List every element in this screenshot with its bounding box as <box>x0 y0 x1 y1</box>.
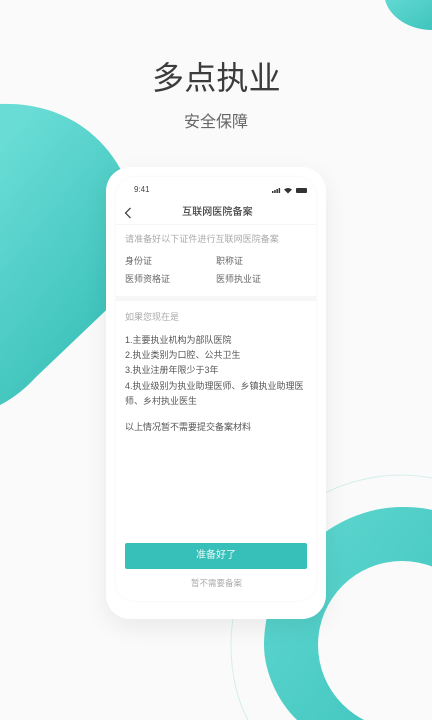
conditions list <box>125 335 304 406</box>
ready button: 准备好了 <box>196 550 236 561</box>
documents list: 职称证 <box>216 256 243 266</box>
documents list: 医师执业证 <box>216 274 261 284</box>
title: 多点执业 <box>152 60 281 96</box>
header divider <box>116 224 316 225</box>
documents list: 医师资格证 <box>125 274 170 284</box>
conditions list: 4.执业级别为执业助理医师、乡镇执业助理医师、乡村执业医生 <box>125 381 304 406</box>
screen heading: 互联网医院备案 <box>182 207 253 218</box>
back arrow icon <box>124 208 131 218</box>
ready button <box>125 543 307 569</box>
conditions list: 2.执业类别为口腔、公共卫生 <box>125 350 241 360</box>
skip link: 暂不需要备案 <box>191 578 242 588</box>
section divider <box>116 296 316 301</box>
status bar icons <box>272 188 307 194</box>
phone mockup <box>106 167 326 619</box>
documents prompt: 请准备好以下证件进行互联网医院备案 <box>125 234 279 244</box>
conditions prompt: 如果您现在是 <box>125 312 179 322</box>
documents list: 身份证 <box>125 256 152 266</box>
conditions list: 1.主要执业机构为部队医院 <box>125 335 232 345</box>
conditions note: 以上情况暂不需要提交备案材料 <box>125 422 251 432</box>
subtitle: 安全保障 <box>184 114 248 131</box>
phone screen panel <box>116 177 316 601</box>
conditions list: 3.执业注册年限少于3年 <box>125 365 219 375</box>
status bar time: 9:41 <box>134 185 150 194</box>
documents list <box>125 256 261 284</box>
